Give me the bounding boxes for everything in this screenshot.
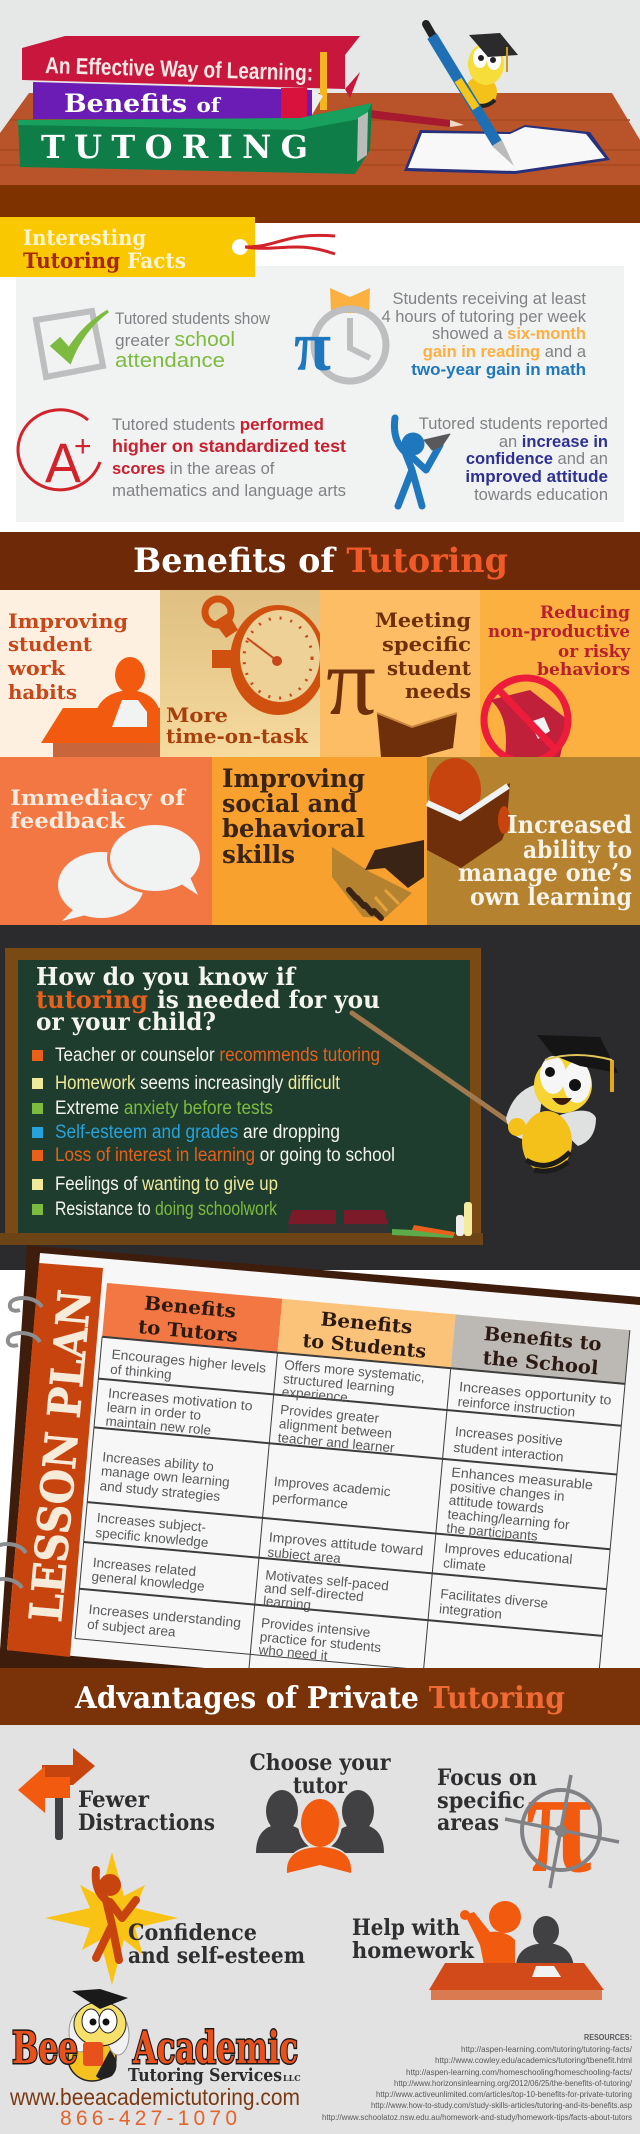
fact: test scores: mathematics and language arts <box>112 482 346 500</box>
column: tutors: of thinking <box>110 1362 172 1382</box>
column: school: Improves educational <box>444 1540 573 1567</box>
spiral rings <box>0 1298 42 1588</box>
column: students: performance <box>272 1490 349 1511</box>
panel: more time-on-task <box>160 590 326 757</box>
icon: pi in crosshair: π <box>526 1738 592 1904</box>
table header: benefits to students: Benefits <box>320 1308 413 1339</box>
icon: signpost <box>18 1748 95 1840</box>
bee logo mascot <box>68 1989 129 2081</box>
advantage: focus on specific areas: specific <box>437 1788 525 1814</box>
panel: improving student work habits: student <box>8 632 93 656</box>
panel: dark chalkboard section <box>0 925 640 1270</box>
logo: bee academic tutoring services <box>12 1989 301 2086</box>
advantage: help with homework: Help with <box>352 1915 460 1941</box>
fact: confidence: confidence and an <box>466 450 608 468</box>
icon: open book <box>377 713 457 757</box>
column: tutors: maintain new role <box>105 1413 212 1438</box>
column: students: Motivates self-paced <box>265 1567 389 1593</box>
column: students: Offers more systematic, <box>284 1357 425 1385</box>
table grid <box>71 1283 630 1729</box>
panel: improving student work habits <box>0 590 160 757</box>
column: students: Improves attitude toward <box>268 1530 424 1558</box>
icon: stopwatch <box>205 599 326 715</box>
icon: cheering person <box>96 1870 136 1960</box>
table header: benefits to tutors: to Tutors <box>137 1316 239 1347</box>
resources list: RESOURCES: <box>584 2033 632 2042</box>
table header: benefits to tutors: Benefits <box>143 1292 237 1323</box>
column: school: Enhances measurable <box>451 1465 594 1492</box>
icon: clock with pi <box>294 288 386 386</box>
panel: reducing risky behaviors: Reducing <box>540 603 630 623</box>
panel: reducing risky behaviors: behaviors <box>537 660 630 680</box>
column: students: practice for students <box>259 1629 382 1655</box>
panel: more time-on-task: More <box>166 703 228 727</box>
checklist: Extreme anxiety before tests <box>55 1098 273 1119</box>
column: students: who need it <box>257 1642 328 1663</box>
fact: attendance: attendance <box>115 350 225 372</box>
column: school: reinforce instruction <box>457 1394 576 1420</box>
resources list: http://www.activeunlimited.com/articles/top-10-benefits-for-private-tutoring <box>376 2090 632 2099</box>
advantage: fewer distractions <box>18 1748 215 1840</box>
advantage: help with homework <box>352 1901 604 2000</box>
pencil <box>370 110 464 127</box>
heading tag: Interesting <box>23 225 146 250</box>
column: school: student interaction <box>453 1440 564 1465</box>
resources list: http://aspen-learning.com/homeschooling/homeschooling-facts/ <box>406 2068 633 2077</box>
column: tutors: specific knowledge <box>95 1525 209 1550</box>
column: students <box>257 1357 439 1671</box>
heading tag <box>0 217 335 277</box>
title line 3: TUTORING <box>41 128 308 166</box>
resources list: http://www.cowley.edu/academics/tutoring/tbenefit.html <box>435 2056 632 2065</box>
panel: immediacy of feedback: feedback <box>10 808 125 833</box>
checklist <box>32 1045 395 1220</box>
fact: six-month gain: 4 hours of tutoring per week <box>381 308 587 326</box>
checklist: Feelings of wanting to give up <box>55 1174 278 1195</box>
panel: advantages background <box>0 1725 640 2134</box>
lesson plan vertical title: LESSON PLAN <box>19 1288 102 1624</box>
chalkboard heading: How do you know if <box>36 962 297 991</box>
table header: benefits to students <box>277 1299 456 1368</box>
column: school: Increases opportunity to <box>458 1379 612 1408</box>
column: tutors: Encourages higher levels <box>111 1347 267 1376</box>
panel: immediacy of feedback <box>0 757 212 925</box>
resources list <box>322 2033 633 2122</box>
website address: www.beeacademictutoring.com <box>9 2084 300 2110</box>
column: students: alignment between <box>278 1416 393 1441</box>
panel: reducing risky behaviors: or risky <box>558 642 631 662</box>
checklist: Self-esteem and grades are dropping <box>55 1122 340 1143</box>
fact: confidence: improved attitude <box>465 467 608 486</box>
advantage: fewer distractions: Fewer <box>78 1787 149 1813</box>
fact: test scores: higher on standardized test <box>112 436 346 456</box>
resources list: http://www.how-to-study.com/study-skills-articles/tutoring-and-its-benefits.asp <box>371 2101 633 2110</box>
advantage: choose your tutor: Choose your <box>250 1750 391 1776</box>
resources list: http://www.schoolatoz.nsw.edu.au/homework-and-study/homework-tips/facts-about-tutors <box>322 2113 632 2122</box>
column: tutors: Increases subject- <box>96 1510 207 1535</box>
icon: speech bubbles <box>58 822 203 921</box>
panel: manage own learning <box>427 757 640 925</box>
column: tutors: learn in order to <box>106 1400 202 1423</box>
header scene: desk with books <box>0 0 640 223</box>
column: students: teacher and learner <box>277 1430 396 1455</box>
icon: reader with book <box>427 758 510 868</box>
advantage: choose your tutor <box>250 1750 391 1880</box>
column: school: positive changes in <box>449 1479 565 1504</box>
fact: test scores <box>18 410 346 500</box>
column: school: teaching/learning for <box>447 1507 571 1533</box>
desk <box>0 93 640 223</box>
advantage: fewer distractions: Distractions <box>78 1810 215 1836</box>
column: school: attitude towards <box>448 1493 545 1516</box>
fact: six-month gain: showed a six-month <box>432 325 586 343</box>
heading: advantages of private tutoring <box>0 1668 640 1725</box>
column: tutors: Increases motivation to <box>107 1386 253 1414</box>
red book <box>22 36 360 110</box>
phone number: 866-427-1070 <box>60 2107 237 2130</box>
lesson plan table <box>71 1283 630 1729</box>
panel: manage own learning: ability to <box>523 835 632 864</box>
fact: six-month gain <box>294 288 587 386</box>
logo: bee academic tutoring services: Tutoring Services <box>128 2065 282 2086</box>
column: students: learning <box>262 1593 312 1613</box>
logo: bee academic tutoring services: Academic <box>132 2023 298 2074</box>
icon: handshake <box>332 840 424 918</box>
chalkboard heading: or your child? <box>36 1007 216 1036</box>
open notebook <box>404 125 610 174</box>
table header: benefits to the school <box>451 1314 630 1384</box>
column: tutors: manage own learning <box>100 1463 230 1490</box>
chalkboard heading: is needed for you <box>157 985 380 1014</box>
orange binding strip <box>7 1263 103 1657</box>
logo: bee academic tutoring services: Bee <box>12 2023 78 2074</box>
panel: social and behavioral skills: behavioral <box>222 814 365 843</box>
column: tutors: Increases understanding <box>88 1602 242 1630</box>
green book <box>18 103 372 174</box>
icon: prohibition sign <box>484 678 568 762</box>
column: students: structured learning <box>282 1371 395 1396</box>
panel: meeting specific student needs: student <box>387 656 472 680</box>
advantage: help with homework: homework <box>352 1938 475 1964</box>
panel: social and behavioral skills <box>212 757 427 925</box>
chalkboard frame <box>0 948 483 1245</box>
column: students: subject area <box>267 1545 342 1566</box>
icon: person with cap <box>394 418 450 506</box>
column: tutors: of subject area <box>87 1617 177 1640</box>
column: school: the participants <box>446 1520 538 1544</box>
advantage: choose your tutor: tutor <box>293 1773 347 1799</box>
panel: manage own learning: Increased <box>507 810 632 839</box>
book on ledge <box>288 1210 388 1233</box>
table header: benefits to students: to Students <box>302 1330 427 1363</box>
fact: six-month gain: gain in reading and a <box>423 343 587 361</box>
fact: confidence: Tutored students reported <box>419 415 608 433</box>
table header: benefits to the school: Benefits to <box>483 1323 602 1356</box>
panel: reducing risky behaviors: non-productive <box>488 622 630 642</box>
column: tutors: and study strategies <box>99 1478 221 1504</box>
heading: advantages of private tutoring: Advantages of Private Tutoring <box>74 1681 565 1716</box>
chalkboard heading: tutoring <box>36 985 148 1014</box>
checklist: Teacher or counselor recommends tutoring <box>55 1045 380 1066</box>
fact: attendance: greater school <box>115 329 235 351</box>
resources list: http://www.horizonsinlearning.org/2012/06/25/the-benefits-of-tutoring/ <box>394 2079 633 2088</box>
icon: A plus grade <box>18 410 100 494</box>
checklist: Homework seems increasingly difficult <box>55 1073 341 1094</box>
title line 1: An Effective Way of Learning: <box>45 52 313 85</box>
fact: attendance <box>36 310 270 377</box>
checklist: Loss of interest in learning or going to school <box>55 1145 395 1166</box>
column: students: Provides greater <box>280 1402 380 1426</box>
title line 2: Benefits of <box>64 89 221 118</box>
chalk pieces <box>392 1202 472 1238</box>
column: school: Increases positive <box>454 1424 563 1449</box>
column: school: Facilitates diverse <box>440 1586 549 1611</box>
advantage: confidence and self-esteem: Confidence <box>128 1920 257 1946</box>
column: school: climate <box>443 1555 487 1574</box>
resources list: http://aspen-learning.com/tutoring/tutoring-facts/ <box>461 2045 633 2054</box>
column: tutors: Increases related <box>92 1555 197 1579</box>
panel: meeting specific student needs <box>320 590 480 757</box>
panel: meeting specific student needs: specific <box>382 632 471 656</box>
icon: student at desk <box>41 657 160 757</box>
icon: A plus grade: A <box>45 431 82 494</box>
panel: lesson plan notebook <box>0 1245 640 1729</box>
column: school: integration <box>438 1601 503 1622</box>
column: students: Provides intensive <box>260 1615 371 1640</box>
pointer stick <box>352 1013 535 1140</box>
panel: social and behavioral skills: Improving <box>222 764 365 793</box>
icon: clock with pi: π <box>294 306 331 386</box>
panel: interesting tutoring facts <box>0 217 624 522</box>
icon: tutor and student at desk <box>429 1901 604 2000</box>
fact: confidence: an increase in <box>499 433 608 451</box>
logo: bee academic tutoring services: LLC <box>283 2073 301 2083</box>
fact: six-month gain: two-year gain in math <box>411 360 586 379</box>
column: students: Improves academic <box>273 1474 391 1499</box>
fact: test scores: scores in the areas of <box>112 460 275 478</box>
checklist: Resistance to doing schoolwork <box>55 1199 277 1220</box>
column: tutors: Increases ability to <box>102 1449 214 1474</box>
fact: attendance: Tutored students show <box>115 310 270 328</box>
panel: immediacy of feedback: Immediacy of <box>10 785 187 810</box>
panel: improving student work habits: habits <box>8 680 77 704</box>
column: tutors: general knowledge <box>91 1569 205 1594</box>
column: tutors <box>87 1347 267 1646</box>
panel: social and behavioral skills: social and <box>222 789 357 818</box>
panel: improving student work habits: work <box>7 656 66 680</box>
purple book <box>33 82 323 119</box>
fact: confidence: towards education <box>474 486 608 504</box>
heading tag: Tutoring Facts <box>23 248 186 273</box>
bee mascot with pointer <box>506 1035 618 1173</box>
panel: meeting specific student needs: needs <box>405 679 471 703</box>
column: students: and self-directed <box>264 1580 364 1604</box>
icon: A plus grade: + <box>74 430 92 463</box>
heading: benefits of tutoring: Benefits of Tutoring <box>133 541 508 581</box>
column: students: experience <box>281 1384 348 1405</box>
panel: improving student work habits: Improving <box>8 609 128 633</box>
bee on desk <box>465 33 518 108</box>
panel: more time-on-task: time-on-task <box>166 724 309 748</box>
heading: benefits of tutoring <box>0 532 640 590</box>
fact: confidence <box>394 415 608 506</box>
table header: benefits to tutors <box>102 1283 282 1353</box>
panel: manage own learning: manage one’s <box>458 858 632 887</box>
advantage: focus on specific areas: Focus on <box>437 1765 537 1791</box>
icon: checkbox <box>36 311 108 377</box>
advantage: confidence and self-esteem <box>45 1852 305 1985</box>
panel: reducing risky behaviors <box>480 590 640 762</box>
pen <box>426 24 514 166</box>
column: school <box>438 1379 612 1630</box>
table header: benefits to the school: the School <box>482 1347 599 1379</box>
icon: pi: π <box>326 628 376 735</box>
panel: meeting specific student needs: Meeting <box>375 608 471 632</box>
panel: social and behavioral skills: skills <box>222 840 295 869</box>
icon: star burst <box>45 1852 178 1985</box>
fact: six-month gain: Students receiving at least <box>392 290 586 308</box>
advantage: focus on specific areas <box>437 1738 619 1904</box>
advantage: confidence and self-esteem: and self-esteem <box>128 1943 305 1969</box>
fact: test scores: Tutored students performed <box>112 415 324 434</box>
advantage: focus on specific areas: areas <box>437 1810 499 1836</box>
icon: three people <box>256 1790 384 1880</box>
